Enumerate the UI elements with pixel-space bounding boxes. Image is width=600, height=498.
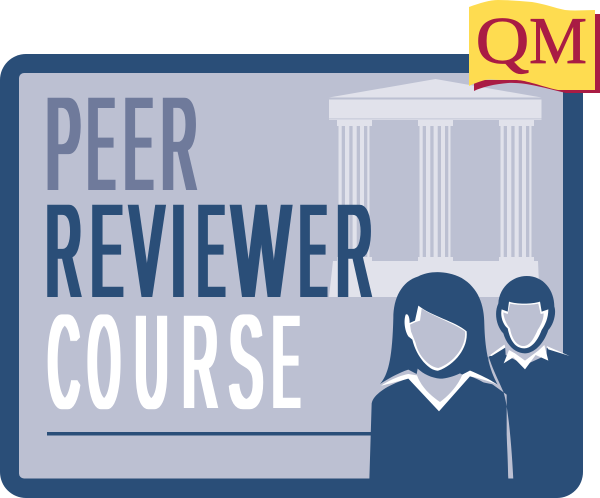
- title: REVIEWER: E: [198, 177, 224, 326]
- text: E: [273, 288, 299, 437]
- title: REVIEWER: W: [232, 177, 290, 326]
- title: COURSE: R: [183, 288, 218, 437]
- icon: woman: [369, 272, 513, 480]
- title: PEER: E: [88, 70, 114, 219]
- panel: light inner background: [19, 73, 563, 478]
- title: PEER: P: [46, 70, 80, 219]
- hair: [380, 272, 498, 385]
- light sliver and neck: [478, 374, 492, 384]
- logo: QM flag: [469, 0, 600, 93]
- icon: two people: [369, 272, 570, 480]
- title: COURSE: S: [230, 288, 262, 437]
- title: REVIEWER: E: [91, 177, 122, 326]
- logo flag: [469, 0, 595, 90]
- logo letters QM: Q: [476, 4, 530, 78]
- title: COURSE: U: [135, 288, 168, 437]
- title: REVIEWER: V: [130, 177, 163, 326]
- title: COURSE: C: [48, 288, 79, 437]
- logo flag shadow: [474, 14, 600, 93]
- body: [369, 376, 508, 480]
- icon: man: [478, 276, 570, 480]
- icon: classical temple: [329, 79, 542, 297]
- title: REVIEWER: E: [300, 177, 326, 326]
- title: COURSE: O: [88, 288, 120, 437]
- underline rule: [47, 432, 372, 436]
- text: R: [162, 70, 196, 219]
- light separator between woman and man: [488, 355, 513, 480]
- logo letters QM: M: [529, 4, 587, 78]
- title: REVIEWER: R: [46, 177, 81, 326]
- text: R: [337, 177, 372, 326]
- title: PEER: E: [125, 70, 152, 219]
- title: REVIEWER: I: [172, 177, 185, 326]
- face: [405, 306, 467, 371]
- white neckline: [381, 371, 498, 411]
